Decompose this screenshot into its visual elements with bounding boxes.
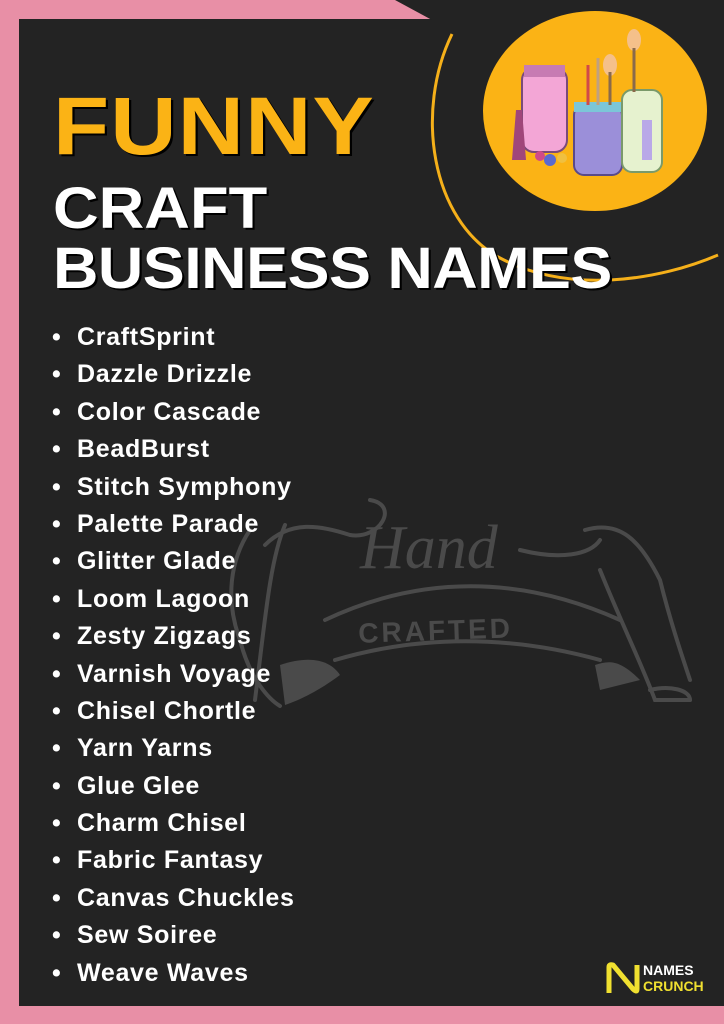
names list: CraftSprint <box>77 323 215 351</box>
names list: Yarn Yarns <box>77 734 213 762</box>
names list: Glitter Glade <box>77 547 236 575</box>
names list: Chisel Chortle <box>77 697 256 725</box>
names list: Sew Soiree <box>77 921 217 949</box>
title <box>53 81 612 301</box>
names list: Weave Waves <box>77 959 249 987</box>
names list: Fabric Fantasy <box>77 846 263 874</box>
logo: names crunch <box>606 962 704 994</box>
title line: BUSINESS NAMES: BUSINESS NAMES <box>53 236 612 301</box>
logo: names crunch: NAMES <box>643 962 694 978</box>
names list: Zesty Zigzags <box>77 622 251 650</box>
decorative ring arc <box>430 33 718 282</box>
names list: Palette Parade <box>77 510 259 538</box>
names list <box>52 323 295 987</box>
watermark: hand crafted: CRAFTED <box>358 612 513 649</box>
title line: FUNNY: FUNNY <box>53 81 375 172</box>
names list: Glue Glee <box>77 772 200 800</box>
names list: BeadBurst <box>77 435 210 463</box>
title line: CRAFT: CRAFT <box>53 176 267 241</box>
names list: Charm Chisel <box>77 809 247 837</box>
watermark: hand crafted: Hand <box>359 514 499 582</box>
names list: Varnish Voyage <box>77 660 271 688</box>
logo: names crunch: CRUNCH <box>643 978 704 994</box>
names list: Color Cascade <box>77 398 261 426</box>
names list: Loom Lagoon <box>77 585 250 613</box>
names list: Canvas Chuckles <box>77 884 295 912</box>
names list: Stitch Symphony <box>77 473 292 501</box>
icon circle: craft jars <box>483 11 707 211</box>
top-right cut corner <box>395 0 724 19</box>
names list: Dazzle Drizzle <box>77 360 252 388</box>
